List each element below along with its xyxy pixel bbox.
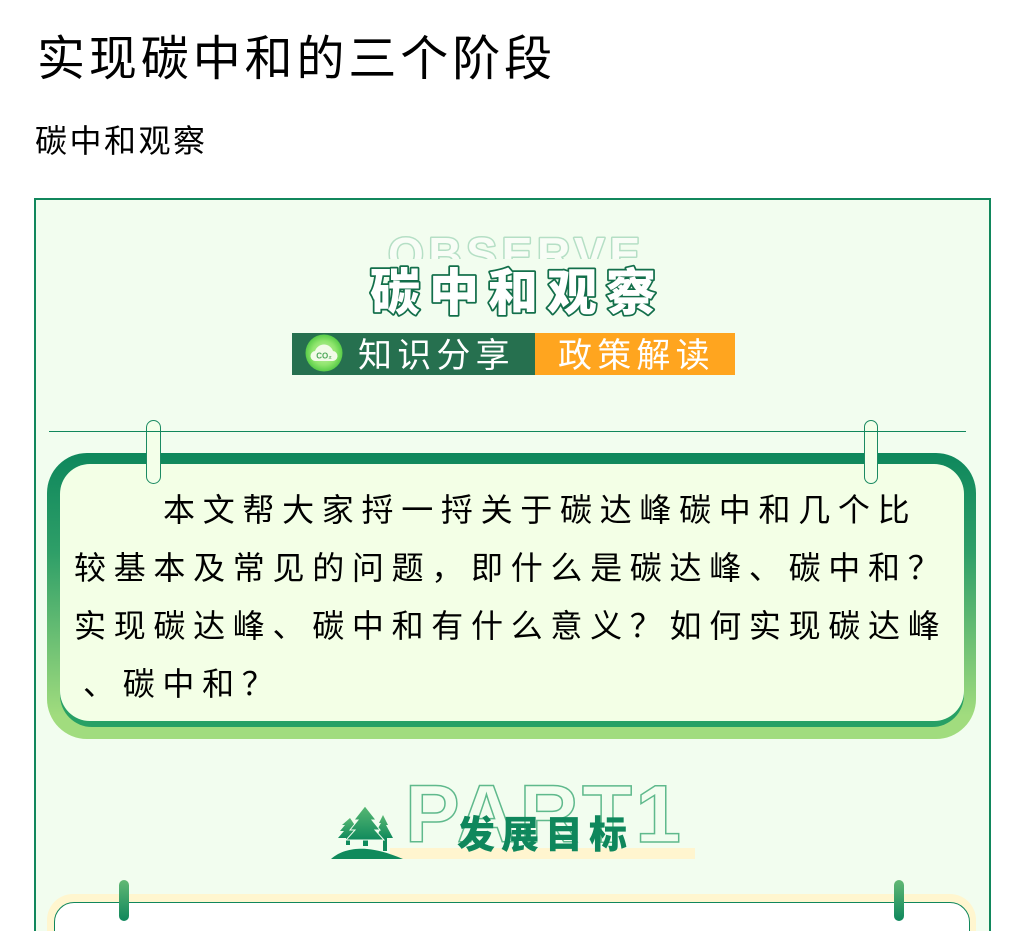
panel: intro frame (47, 453, 976, 739)
intro text: 、碳中和？ (83, 666, 282, 702)
title: 实现碳中和的三个阶段 (37, 33, 556, 86)
peg: right (894, 880, 904, 921)
badge: 政策解读 (535, 333, 735, 375)
icon: CO2 bubble: CO₂ (316, 352, 332, 360)
frame inner fill (60, 464, 964, 721)
label: 政策解读 (558, 337, 715, 375)
card inner (54, 902, 970, 931)
peg: left (119, 880, 129, 921)
label: 知识分享 (358, 337, 515, 375)
icon: pine trees (331, 806, 403, 859)
panel: main article card (34, 198, 991, 931)
section heading: 发展目标: 发展目标 (457, 815, 633, 857)
subtitle: 碳中和观察 (35, 123, 208, 159)
frame inner shadow (60, 464, 964, 727)
watermark: OBSERVE: OBSERVE (388, 228, 640, 280)
intro text: 实现碳达峰、碳中和有什么意义？如何实现碳达峰 (74, 608, 947, 644)
icon: CO2 bubble (306, 334, 342, 372)
section band (390, 848, 695, 859)
clip: right (864, 420, 878, 484)
badge: 知识分享 (292, 333, 535, 375)
heading: 碳中和观察: 碳中和观察 (370, 265, 665, 321)
section watermark: PART1: PART1 (405, 769, 681, 860)
intro text: 本文帮大家捋一捋关于碳达峰碳中和几个比 (163, 492, 917, 528)
intro text (74, 492, 947, 702)
intro text: 较基本及常见的问题，即什么是碳达峰、碳中和？ (74, 550, 947, 586)
panel: next card (47, 894, 976, 931)
clip: left (146, 420, 161, 484)
